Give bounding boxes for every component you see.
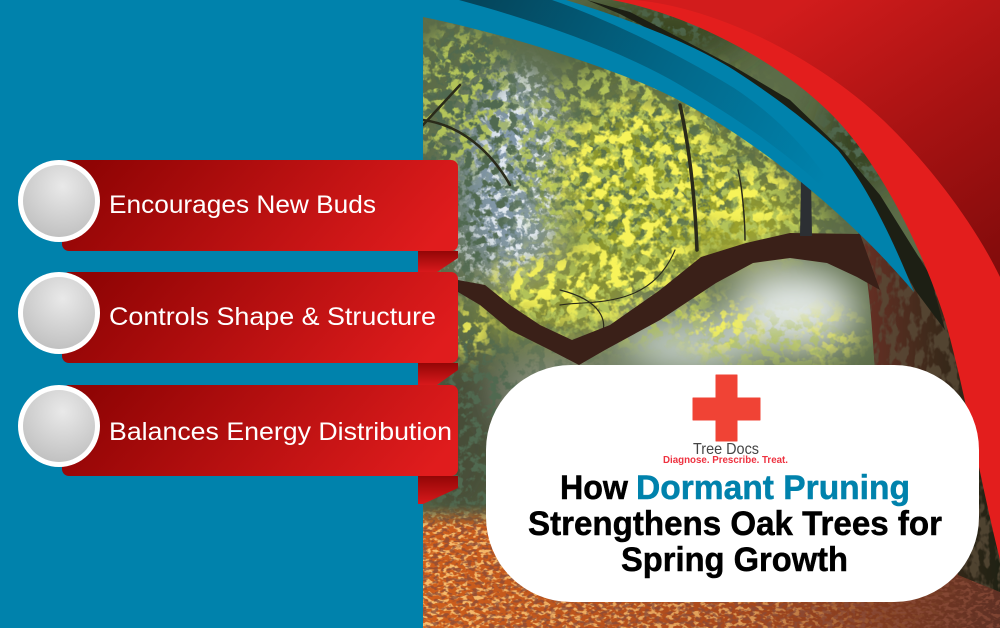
ribbon 1: Encourages New Buds: Encourages New Buds	[109, 191, 376, 219]
logo name: Tree Docs	[693, 441, 759, 458]
upright limb	[800, 180, 812, 236]
dark blue inner swoosh	[459, 0, 850, 215]
logo: red cross	[693, 375, 760, 441]
sky glimpses	[440, 56, 580, 298]
ribbon fold	[418, 476, 458, 504]
title line 2: Strengthens Oak Trees for	[528, 505, 942, 543]
red swoosh	[612, 0, 1000, 560]
title line 3: Spring Growth	[621, 541, 848, 579]
ribbon 2: Controls Shape & Structure: Controls Shape & Structure	[109, 303, 436, 331]
title line 1: Dormant Pruning	[636, 469, 910, 507]
title card	[486, 365, 979, 602]
ribbon 3: Balances Energy Distribution	[18, 385, 458, 504]
photo: oak tree in autumn forest	[410, 0, 1000, 628]
ribbon 1: Encourages New Buds	[18, 160, 458, 272]
logo tagline: Diagnose. Prescribe. Treat.	[663, 454, 788, 466]
title line 1: How	[560, 469, 629, 507]
dark red inner swoosh	[635, 0, 1000, 277]
sunlit yellow foliage	[454, 86, 872, 372]
green foliage	[423, 22, 852, 365]
oak branch	[458, 233, 880, 365]
dark limb along the curve	[587, 0, 945, 330]
forest floor of orange leaves	[423, 505, 1000, 628]
bare twigs	[423, 85, 745, 340]
ribbon 3: Balances Energy Distribution: Balances Energy Distribution	[109, 418, 452, 446]
shadowed foliage	[423, 3, 880, 516]
ribbon fold	[418, 363, 458, 385]
trunk bark texture	[850, 225, 1000, 595]
blue swoosh	[423, 0, 914, 292]
ribbon fold	[418, 251, 458, 272]
oak trunk	[858, 232, 1000, 592]
ribbon 2: Controls Shape & Structure	[18, 272, 458, 385]
